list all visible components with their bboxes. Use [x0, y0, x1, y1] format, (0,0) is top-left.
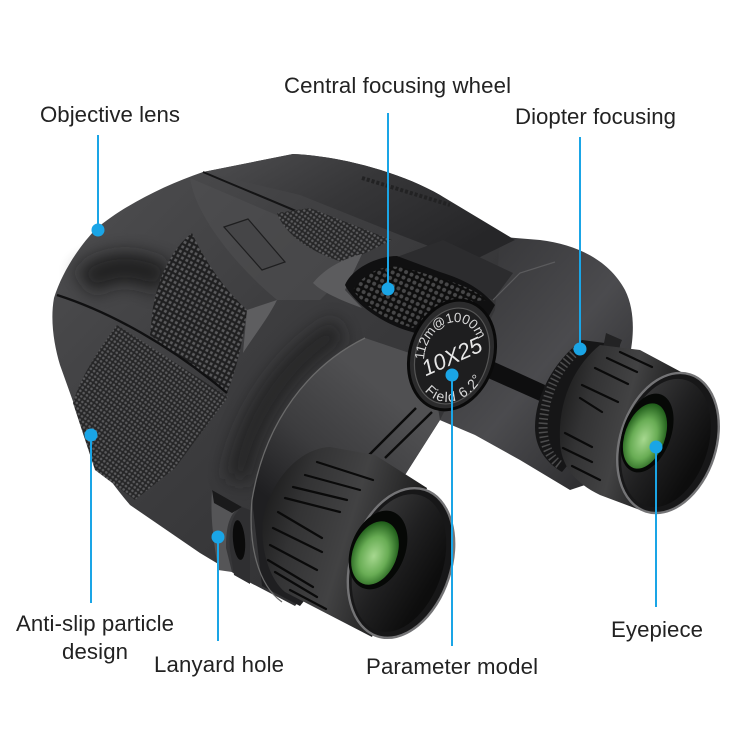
light facet	[243, 300, 277, 353]
dial range text: 112m@1000m	[415, 312, 484, 359]
flange interior	[252, 338, 440, 606]
inner cup	[606, 367, 726, 519]
callout: objective lens	[40, 102, 180, 236]
right eyepiece	[535, 333, 736, 526]
upper grip patch	[150, 233, 247, 393]
dial ring	[395, 289, 509, 421]
left body	[52, 154, 500, 606]
mount strip	[211, 490, 242, 572]
callout: eyepiece: Eyepiece	[611, 617, 703, 642]
rim	[330, 474, 472, 652]
bridge grooves	[367, 408, 432, 458]
callout: eyepiece	[611, 440, 703, 642]
green lens	[615, 397, 675, 475]
right panel edge	[493, 262, 555, 300]
callout: lanyard hole	[154, 530, 284, 677]
left eyepiece	[262, 447, 472, 652]
wheel recess	[345, 256, 495, 350]
parameter dial	[407, 298, 497, 412]
callout: lanyard hole: Lanyard hole	[154, 652, 284, 677]
focus ring ridges	[543, 348, 580, 465]
mount top	[212, 490, 242, 513]
dial field text: Field 6.2°	[425, 374, 478, 402]
black strip right of dial	[488, 360, 545, 402]
callout: objective lens: Objective lens	[40, 102, 180, 127]
badge recess	[224, 219, 285, 270]
dark band outside flange	[238, 330, 340, 480]
right barrel housing	[420, 235, 633, 490]
light centre wedge	[190, 178, 360, 300]
panel above wheel	[397, 240, 513, 300]
callout: parameter model	[366, 368, 538, 679]
callout: parameter model: Parameter model	[366, 654, 538, 679]
light wedge left of wheel	[313, 254, 362, 308]
lens housing	[338, 502, 418, 598]
flange edge highlight	[251, 338, 365, 602]
green lens	[342, 514, 408, 592]
callout: central focusing wheel: Central focusing wheel	[284, 73, 511, 98]
callout: anti-slip particle design	[16, 428, 174, 664]
top grip patch	[277, 208, 392, 263]
barrel	[262, 447, 427, 637]
lower grip patch	[73, 325, 228, 500]
barrel ridges	[563, 352, 652, 480]
mount fin	[230, 507, 250, 584]
callout: central focusing wheel	[284, 73, 511, 296]
callout: diopter focusing: Diopter focusing	[515, 104, 676, 129]
rim	[600, 360, 736, 526]
dark shading on objective end	[85, 268, 165, 283]
lanyard hole slot	[231, 520, 247, 560]
callout: anti-slip particle design: design	[62, 639, 128, 664]
focus ring	[535, 340, 620, 472]
top plate seam	[203, 172, 375, 245]
dial face	[403, 298, 501, 414]
focusing wheel knurl	[353, 267, 487, 328]
barrel	[560, 345, 683, 513]
top plate	[203, 154, 515, 262]
binoculars illustration	[52, 154, 720, 639]
barrel ridges	[268, 462, 373, 609]
inner cup	[335, 482, 463, 644]
focus ring bump	[603, 333, 622, 350]
lens housing	[610, 386, 684, 480]
lanyard mount	[211, 490, 250, 584]
top logo ridges	[362, 178, 450, 205]
body seam	[57, 295, 227, 393]
callout: anti-slip particle design: Anti-slip particle	[16, 611, 174, 636]
dial model text: 10X25	[418, 332, 487, 381]
callout: diopter focusing	[515, 104, 676, 356]
